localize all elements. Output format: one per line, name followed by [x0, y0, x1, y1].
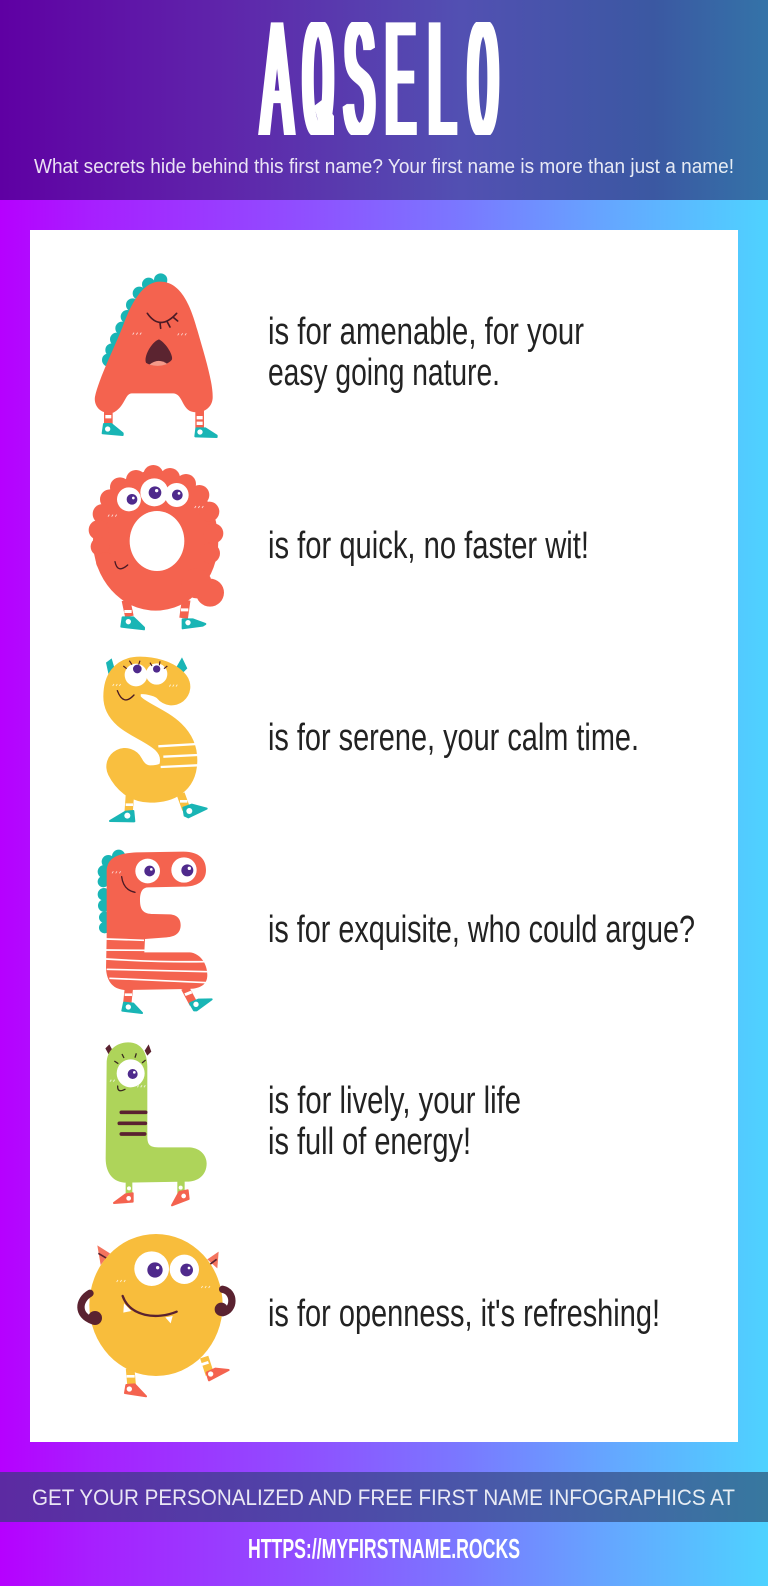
- footer band: [0, 1472, 768, 1522]
- text: S line: is for serene, your calm time.: [268, 717, 639, 759]
- icon: monster letter Q: [89, 465, 224, 629]
- text: L lines: is full of energy!: [268, 1121, 471, 1163]
- icon: monster letter A: [95, 273, 217, 437]
- text: L lines: is for lively, your life: [268, 1080, 521, 1122]
- text: A line: [268, 311, 584, 394]
- text: L lines: [268, 1080, 521, 1163]
- footer url: HTTPS://MYFIRSTNAME.ROCKS: [248, 1533, 520, 1564]
- icon: arms of monster O: [81, 1289, 232, 1321]
- text: A line: easy going nature.: [268, 352, 500, 394]
- text: O line: is for openness, it's refreshing!: [268, 1293, 660, 1335]
- title: [258, 22, 500, 135]
- panel: white letters card: [30, 230, 738, 1442]
- subtitle: What secrets hide behind this first name? Your first name is more than just a name!: [34, 156, 734, 178]
- icon: monster letter S: [106, 657, 207, 821]
- icon: monster letter O: [81, 1234, 232, 1396]
- footer call to action: GET YOUR PERSONALIZED AND FREE FIRST NAME INFOGRAPHICS AT: [32, 1485, 735, 1510]
- text: A line: is for amenable, for your: [268, 311, 584, 353]
- icon: monster letter E: [98, 850, 212, 1013]
- header band: [0, 0, 768, 200]
- icon: monster letter L: [105, 1042, 207, 1205]
- text: Q line: is for quick, no faster wit!: [268, 525, 589, 567]
